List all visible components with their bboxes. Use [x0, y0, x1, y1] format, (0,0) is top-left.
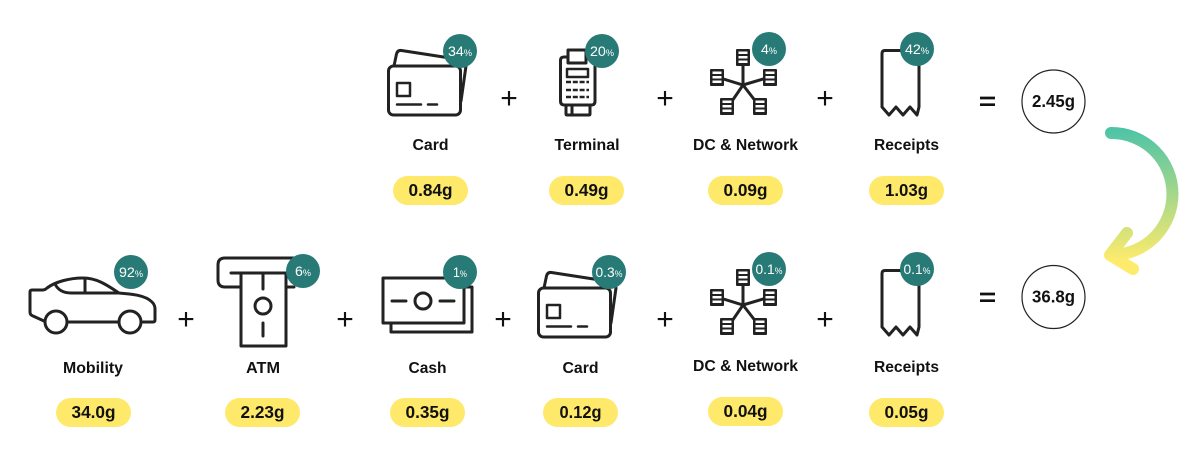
value: 0.09g: 0.09g: [724, 180, 768, 200]
value: 0.35g: 0.35g: [406, 402, 450, 422]
value: 2.23g: [225, 398, 300, 427]
badge: 4%: [752, 32, 786, 66]
total: 2.45g: 2.45g: [1032, 91, 1075, 111]
value: 0.84g: [393, 176, 468, 205]
value: 0.49g: [549, 176, 624, 205]
badge: 0.3%: [592, 255, 626, 289]
label: Card: Card: [562, 360, 598, 377]
value: 0.49g: 0.49g: [564, 180, 608, 200]
label: DC & Network: DC & Network: [693, 137, 798, 154]
badge: 20%: [585, 34, 619, 68]
value: 1.03g: [869, 176, 944, 205]
value: 0.12g: 0.12g: [560, 402, 602, 422]
badge: 0.1%: [900, 252, 934, 286]
arrow: curved gradient: [1110, 133, 1172, 269]
icon: car: [30, 278, 155, 333]
value: 0.04g: [708, 397, 783, 426]
bottom row item: ATM: [218, 254, 320, 427]
label: Card: Card: [412, 137, 448, 154]
badge: 92%: 92%: [119, 264, 143, 280]
badge: 0.1%: 0.1%: [904, 261, 930, 277]
top row item: DC and network: [693, 32, 798, 205]
value: 0.12g: [543, 398, 618, 427]
bottom row item: DC and network: [693, 252, 798, 426]
badge: 0.1%: 0.1%: [756, 261, 782, 277]
badge: 6%: [286, 254, 320, 288]
value: 0.35g: [390, 398, 465, 427]
label: Cash: Cash: [408, 360, 446, 377]
value: 0.05g: [869, 398, 944, 427]
label: DC & Network: DC & Network: [693, 358, 798, 375]
plus: +: [656, 82, 674, 115]
plus: +: [500, 82, 518, 115]
bottom row item: mobility: [30, 255, 155, 427]
badge: 1%: 1%: [453, 264, 467, 280]
value: 0.09g: [708, 176, 783, 205]
badge: 20%: 20%: [590, 43, 614, 59]
badge: 1%: [443, 255, 477, 289]
label: Receipts: Receipts: [874, 359, 939, 376]
value: 0.05g: 0.05g: [884, 402, 928, 422]
label: Receipts: Receipts: [874, 137, 939, 154]
badge: 6%: 6%: [295, 263, 311, 279]
value: 34.0g: [56, 398, 131, 427]
bottom row item: cash: [383, 255, 477, 427]
value: 2.23g: 2.23g: [240, 402, 284, 422]
bottom row item: card: [538, 255, 626, 427]
label: Terminal: Terminal: [554, 137, 620, 154]
plus: +: [656, 303, 674, 336]
icon: receipt: [882, 50, 919, 115]
plus: +: [177, 303, 195, 336]
total: 2.45g: [1022, 70, 1085, 133]
top row item: receipts: [869, 32, 944, 205]
icon: credit cards: [388, 50, 466, 115]
equals: [980, 294, 995, 301]
badge: 42%: 42%: [905, 41, 929, 57]
equals: [980, 98, 995, 105]
plus: +: [816, 82, 834, 115]
icon: network of servers: [710, 49, 777, 115]
icon: payment terminal: [560, 50, 595, 115]
total: 36.8g: 36.8g: [1032, 286, 1075, 306]
badge: 0.3%: 0.3%: [596, 264, 622, 280]
value: 0.84g: 0.84g: [408, 180, 452, 200]
top row item: card: [388, 34, 477, 205]
label: Mobility: Mobility: [63, 360, 123, 377]
total: 36.8g: [1022, 266, 1085, 328]
badge: 0.1%: [752, 252, 786, 286]
icon: ATM slot: [218, 258, 297, 346]
value: 0.04g: 0.04g: [724, 401, 768, 421]
badge: 92%: [114, 255, 148, 289]
badge: 4%: 4%: [761, 41, 777, 57]
value: 1.03g: 1.03g: [885, 180, 928, 200]
top row item: terminal: [549, 34, 624, 205]
bottom row item: receipts: [869, 252, 944, 427]
icon: banknotes: [383, 278, 472, 332]
icon: credit cards: [538, 272, 616, 337]
badge: 34%: [443, 34, 477, 68]
label: ATM: ATM: [246, 360, 280, 377]
icon: network of servers: [710, 269, 777, 335]
plus: +: [494, 303, 512, 336]
value: 34.0g: 34.0g: [72, 402, 116, 422]
badge: 42%: [900, 32, 934, 66]
plus: +: [816, 303, 834, 336]
icon: receipt: [882, 270, 919, 335]
plus: +: [336, 303, 354, 336]
badge: 34%: 34%: [448, 43, 472, 59]
